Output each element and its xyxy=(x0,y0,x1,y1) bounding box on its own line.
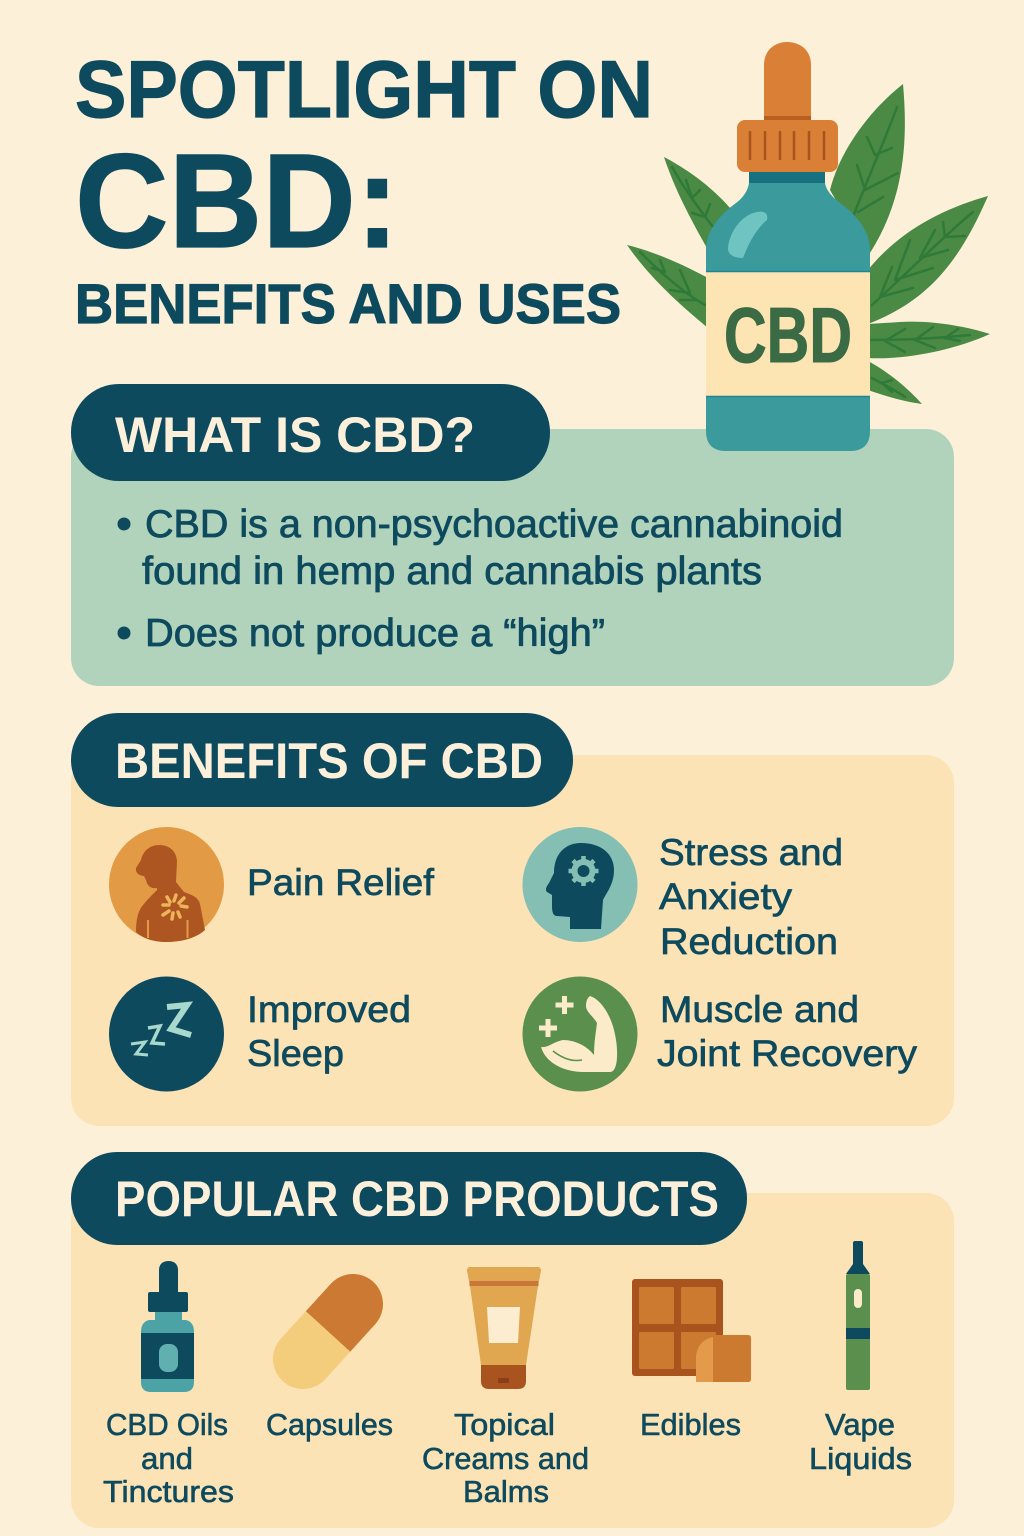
text: stress and anxiety reduction: Stress and xyxy=(659,832,843,873)
icon: pain relief xyxy=(109,827,224,942)
icon: bottle body xyxy=(706,172,870,451)
text: topical creams and balms: Topical xyxy=(454,1407,555,1442)
panel: benefits xyxy=(71,755,954,1126)
icon: improved sleep xyxy=(109,976,224,1092)
heading pill: what is CBD: WHAT IS CBD? xyxy=(115,407,475,463)
text: CBD oils and tinctures: Tinctures xyxy=(103,1474,234,1509)
title xyxy=(75,45,653,335)
heading pill: benefits xyxy=(71,713,573,807)
heading pill: products: POPULAR CBD PRODUCTS xyxy=(115,1171,719,1227)
text: pain relief: Pain Relief xyxy=(247,862,435,903)
text: muscle and joint recovery: Joint Recovery xyxy=(657,1033,918,1074)
icon: hemp leaves xyxy=(627,84,990,404)
illustration: CBD dropper bottle with leaves xyxy=(627,42,990,451)
text: improved sleep: Improved xyxy=(247,989,411,1030)
text: vape liquids: Liquids xyxy=(809,1441,912,1476)
title: SPOTLIGHT ON xyxy=(75,45,653,135)
text: stress and anxiety reduction: Anxiety xyxy=(659,876,793,917)
icon: muscle and joint recovery xyxy=(522,976,638,1092)
icon: CBD oil bottle xyxy=(141,1261,194,1392)
text: topical creams and balms: Balms xyxy=(463,1474,549,1509)
heading pill: benefits: BENEFITS OF CBD xyxy=(115,733,543,789)
text block: what is CBD bullets: Does not produce a “high” xyxy=(145,612,605,655)
bottle highlight xyxy=(728,212,767,258)
bottle neck shadow xyxy=(749,172,825,183)
text: edibles: Edibles xyxy=(640,1407,741,1442)
bottle label xyxy=(706,272,870,396)
text: vape liquids xyxy=(809,1407,912,1476)
dropper cap xyxy=(737,116,838,172)
title: BENEFITS AND USES xyxy=(75,272,621,335)
text: stress and anxiety reduction xyxy=(659,832,843,962)
text: muscle and joint recovery: Muscle and xyxy=(660,989,859,1030)
icon: capsule xyxy=(273,1274,383,1389)
text: muscle and joint recovery xyxy=(657,989,918,1074)
text: stress and anxiety reduction: Reduction xyxy=(660,921,838,962)
icon: vape pen xyxy=(846,1241,870,1390)
text: topical creams and balms: Creams and xyxy=(422,1441,589,1476)
title: CBD: xyxy=(75,127,399,276)
text: vape liquids: Vape xyxy=(825,1407,895,1442)
text: improved sleep xyxy=(247,989,411,1074)
heading pill: products xyxy=(71,1152,747,1245)
text: CBD oils and tinctures: CBD Oils xyxy=(106,1407,228,1442)
text: capsules: Capsules xyxy=(266,1407,393,1442)
text: improved sleep: Sleep xyxy=(247,1033,344,1074)
text: topical creams and balms xyxy=(422,1407,589,1509)
text block: what is CBD bullets: found in hemp and cannabis plants xyxy=(142,550,762,593)
text block: what is CBD bullets: CBD is a non-psychoactive cannabinoid xyxy=(145,503,843,546)
dropper bulb xyxy=(764,42,811,120)
icon: stress and anxiety xyxy=(522,827,638,942)
panel: products xyxy=(71,1193,954,1528)
heading pill: what is CBD xyxy=(71,384,550,481)
text: CBD oils and tinctures xyxy=(103,1407,234,1509)
text block: what is CBD bullets xyxy=(118,503,843,655)
icon: chocolate edibles xyxy=(632,1279,751,1382)
bottle label: CBD xyxy=(724,291,852,379)
panel: what is CBD xyxy=(71,429,954,686)
text: CBD oils and tinctures: and xyxy=(141,1441,193,1476)
icon: cream tube xyxy=(467,1267,541,1389)
